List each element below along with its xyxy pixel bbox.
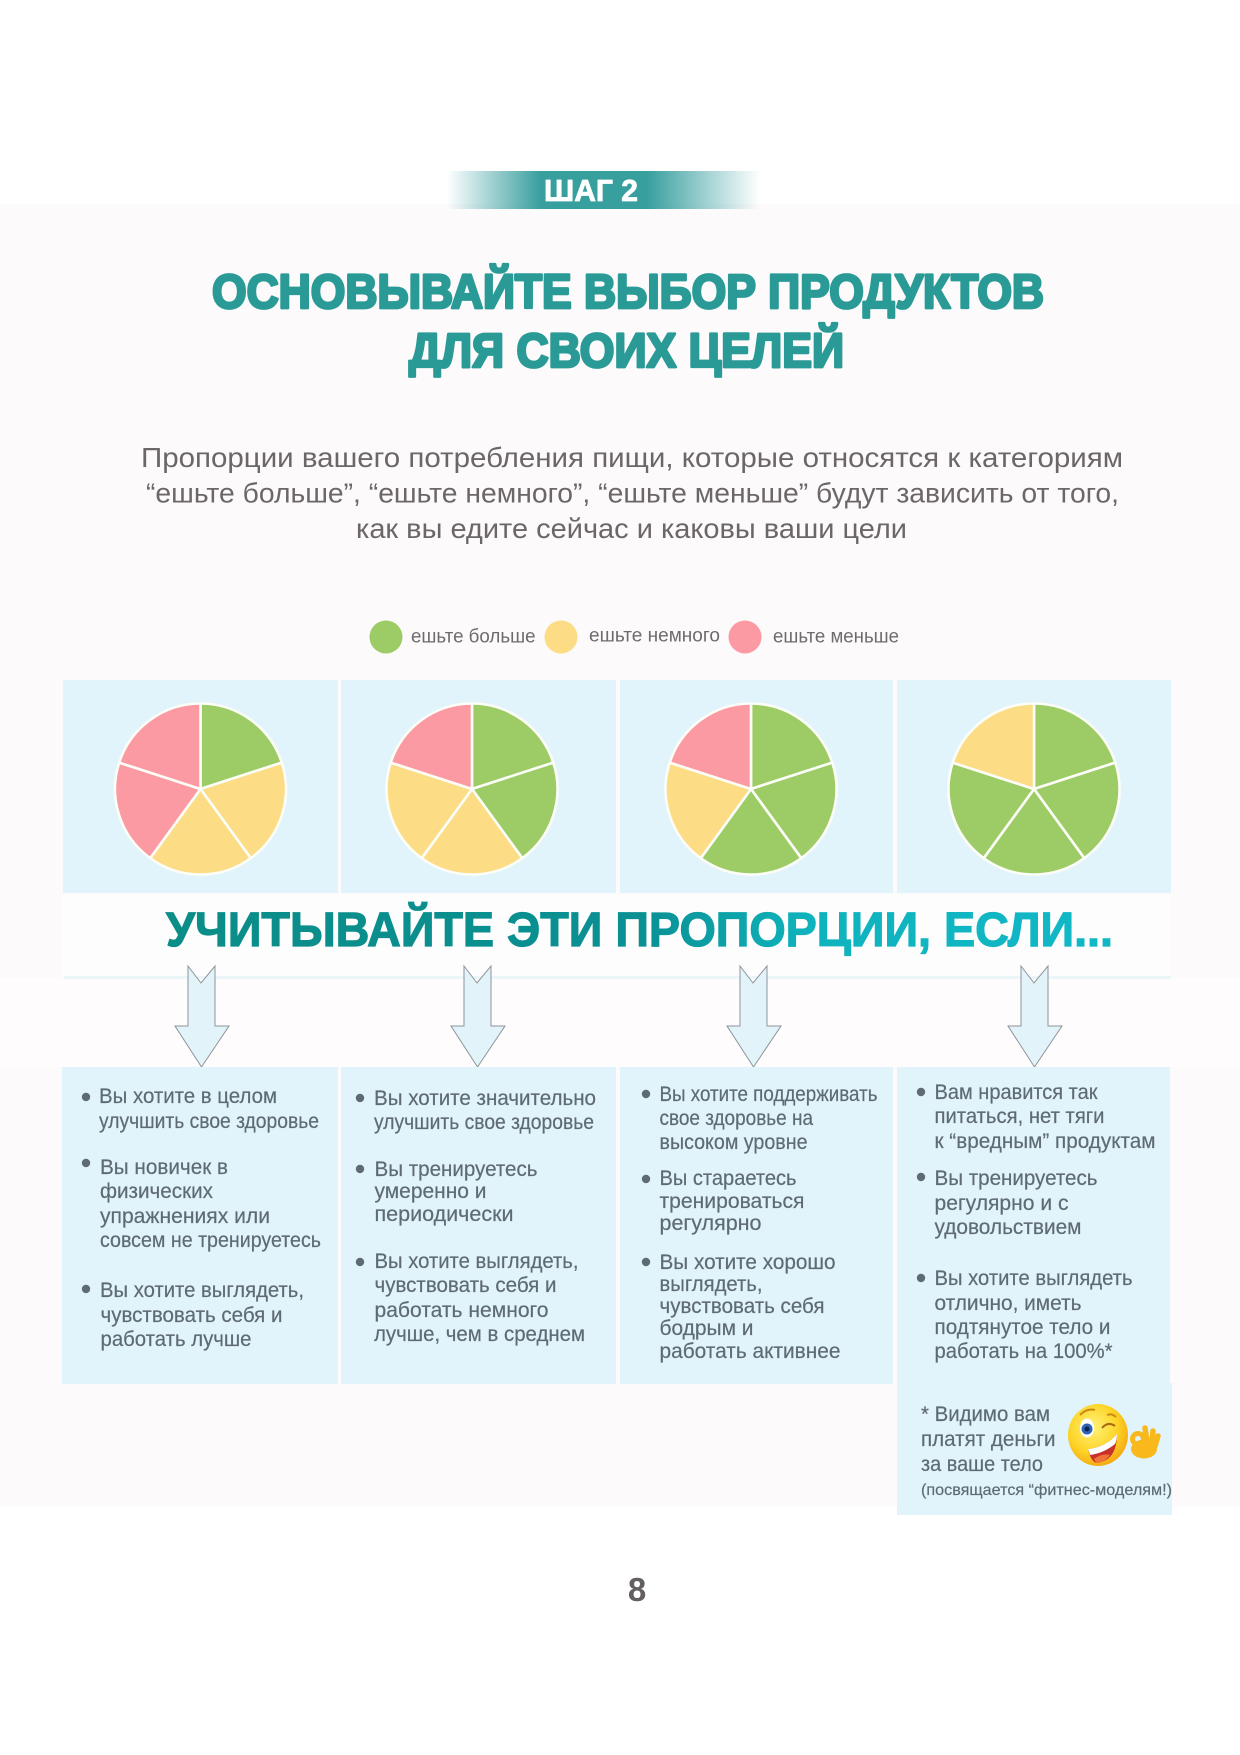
page background (0, 204, 1240, 1507)
pie chart 1 (115, 704, 286, 875)
panel: column 2 conditions: Вы хотите значительно (374, 1086, 596, 1110)
panel: column 3 conditions: высоком уровне (660, 1130, 808, 1154)
panel: column 4 conditions: работать на 100%* (934, 1339, 1113, 1363)
panel: column 1 conditions: совсем не тренируетесь (100, 1228, 321, 1252)
panel: column 4 conditions: Вы тренируетесь (934, 1166, 1098, 1190)
panel: footnote: за ваше тело (921, 1452, 1043, 1476)
panel: column 3 conditions: бодрым и (660, 1316, 754, 1340)
pie panel backgrounds (63, 680, 1171, 893)
step badge: ШАГ 2 (544, 173, 638, 208)
panel: column 4 conditions: Вы хотите выглядеть (934, 1266, 1132, 1290)
panel: column 3 conditions: Вы стараетесь (660, 1166, 796, 1190)
lighter strip behind arrows (0, 978, 1240, 1067)
panel: column 4 conditions: к “вредным” продуктам (934, 1129, 1156, 1153)
panel: column 2 conditions: Вы тренируетесь (374, 1157, 538, 1181)
panel: column 4 conditions: подтянутое тело и (934, 1315, 1110, 1339)
panel: column 3 conditions (620, 1067, 893, 1384)
panel: column 1 conditions: Вы новичек в (100, 1155, 228, 1179)
intro paragraph (141, 442, 1123, 544)
panel: column 4 conditions: Вам нравится так (934, 1080, 1098, 1104)
heading band (62, 895, 1171, 979)
panel: column 3 conditions: Вы хотите поддерживать (660, 1082, 878, 1106)
title: ОСНОВЫВАЙТЕ ВЫБОР ПРОДУКТОВ (212, 264, 1044, 319)
legend: ешьте больше (411, 626, 536, 648)
panel: column 4 conditions: отлично, иметь (934, 1291, 1082, 1315)
arrow 3 (727, 966, 781, 1067)
panel: column 3 conditions: регулярно (660, 1211, 762, 1235)
icon: winking smiley with OK hand (1068, 1404, 1158, 1466)
panel: column 2 conditions: Вы хотите выглядеть, (374, 1249, 578, 1273)
panel: column 2 conditions: лучше, чем в среднем (374, 1322, 585, 1346)
arrow 4 (1008, 966, 1062, 1067)
pie chart 2 (387, 704, 557, 875)
panel: column 1 conditions: упражнениях или (100, 1204, 270, 1228)
panel: column 1 conditions: работать лучше (100, 1327, 252, 1351)
panel: column 2 conditions: работать немного (374, 1298, 549, 1322)
legend (370, 620, 899, 654)
panel: column 4 conditions (897, 1067, 1170, 1384)
panel: column 2 conditions: периодически (374, 1202, 514, 1226)
intro paragraph: как вы едите сейчас и каковы ваши цели (356, 513, 907, 544)
pie chart 3 (666, 704, 836, 875)
panel: column 2 conditions: умеренно и (374, 1179, 486, 1203)
panel: column 1 conditions: чувствовать себя и (100, 1303, 282, 1327)
title (212, 264, 1044, 378)
panel: column 3 conditions: тренироваться (660, 1189, 804, 1213)
legend: ешьте немного (589, 626, 720, 646)
pie chart 4 (949, 704, 1119, 875)
panel: column 4 conditions: регулярно и с (934, 1191, 1069, 1215)
arrow 1 (175, 966, 229, 1067)
panel: footnote (897, 1383, 1172, 1515)
panel: column 1 conditions: Вы хотите выглядеть, (100, 1278, 304, 1302)
panel: column 4 conditions: удовольствием (934, 1215, 1082, 1239)
arrow 2 (451, 966, 505, 1067)
panel: column 1 conditions: улучшить свое здоровье (99, 1109, 319, 1133)
panel: column 1 conditions (62, 1067, 338, 1384)
panel: column 3 conditions: Вы хотите хорошо (660, 1250, 836, 1274)
panel: column 3 conditions: чувствовать себя (660, 1294, 824, 1318)
panel: column 3 conditions: свое здоровье на (660, 1106, 813, 1130)
title: ДЛЯ СВОИХ ЦЕЛЕЙ (409, 323, 844, 378)
panel: column 3 conditions: выглядеть, (660, 1272, 762, 1296)
page number: 8 (628, 1571, 646, 1608)
step badge (447, 171, 760, 209)
panel: footnote: * Видимо вам (921, 1402, 1050, 1426)
panel: column 2 conditions: чувствовать себя и (374, 1273, 556, 1297)
panel: footnote: (посвящается “фитнес-моделям!) (921, 1482, 1172, 1499)
panel: footnote: платят деньги (921, 1427, 1056, 1451)
panel: column 2 conditions: улучшить свое здоровье (374, 1110, 594, 1134)
intro paragraph: “ешьте больше”, “ешьте немного”, “ешьте меньше” будут зависить от того, (146, 478, 1119, 508)
intro paragraph: Пропорции вашего потребления пищи, которые относятся к категориям (141, 442, 1123, 473)
panel: column 4 conditions: питаться, нет тяги (934, 1104, 1104, 1128)
legend: ешьте меньше (773, 626, 899, 648)
heading band: УЧИТЫВАЙТЕ ЭТИ ПРОПОРЦИИ, ЕСЛИ... (166, 902, 1113, 957)
panel: column 1 conditions: Вы хотите в целом (99, 1084, 277, 1108)
panel: column 2 conditions (341, 1067, 616, 1384)
panel: column 1 conditions: физических (100, 1179, 213, 1203)
panel: column 3 conditions: работать активнее (660, 1339, 840, 1363)
